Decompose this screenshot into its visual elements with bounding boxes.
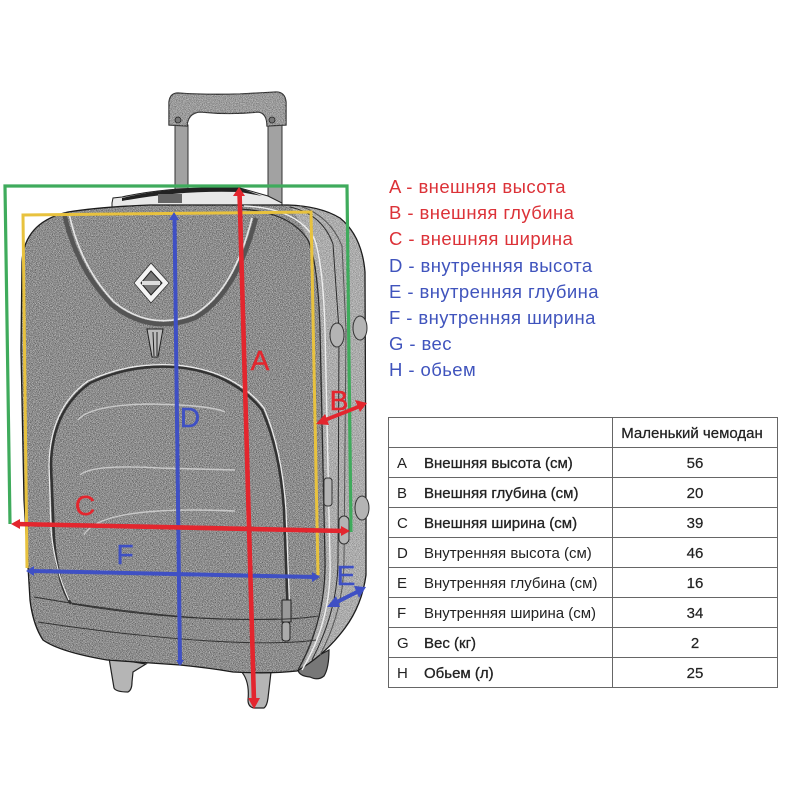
legend: B - внешняя глубина: [389, 202, 575, 223]
row values: 39: [687, 515, 703, 532]
dimension letters on the suitcase: A: [251, 345, 270, 376]
row letters: D: [397, 545, 408, 562]
row labels: Обьем (л): [424, 665, 494, 682]
row letters: A: [397, 455, 407, 472]
row letters: [397, 455, 409, 682]
row values: 25: [687, 665, 703, 682]
outline: inner dimensions (yellow): [23, 212, 318, 575]
table of dimensions: [388, 417, 778, 688]
suitcase body: [21, 205, 366, 673]
row letters: B: [397, 485, 407, 502]
row values: [687, 455, 703, 682]
row letters: F: [397, 605, 406, 622]
row values: 56: [687, 455, 703, 472]
arrow E: inner depth: [327, 586, 366, 607]
top pocket with zipper arc: [64, 213, 256, 324]
arrow C: outer width: [11, 519, 350, 536]
front pocket with zipper: [49, 365, 290, 619]
arrow A: outer height: [233, 187, 260, 709]
row labels: Внутренняя глубина (см): [424, 575, 597, 592]
dimension letters on the suitcase: E: [337, 560, 355, 591]
dimension letters on the suitcase: [75, 345, 355, 591]
row values: 2: [691, 635, 699, 652]
dimension letters on the suitcase: F: [116, 539, 134, 570]
legend: G - вес: [389, 333, 452, 354]
icon: rear wheels: [109, 650, 329, 708]
legend: D - внутренняя высота: [389, 255, 593, 276]
bottom panel seams: [34, 597, 318, 643]
dimension letters on the suitcase: B: [330, 385, 348, 416]
row letters: C: [397, 515, 408, 532]
row labels: Внешняя высота (см): [424, 455, 573, 472]
row values: 16: [687, 575, 703, 592]
legend: F - внутренняя ширина: [389, 307, 596, 328]
legend: [389, 176, 599, 380]
arrow D: inner height: [169, 212, 184, 666]
side panel seams and zippers: [240, 206, 346, 670]
legend: C - внешняя ширина: [389, 228, 574, 249]
icon: top pocket zipper pull: [147, 329, 163, 357]
row values: 20: [687, 485, 703, 502]
row labels: Внешняя глубина (см): [424, 485, 578, 502]
icon: side feet and side zipper pull: [324, 316, 369, 544]
row labels: Внешняя ширина (см): [424, 515, 577, 532]
arrow B: outer depth: [316, 400, 367, 425]
row letters: E: [397, 575, 407, 592]
legend: A - внешняя высота: [389, 176, 566, 197]
row letters: G: [397, 635, 409, 652]
table grid: [388, 417, 778, 688]
dimension letters on the suitcase: D: [180, 402, 200, 433]
dimension letters on the suitcase: C: [75, 490, 95, 521]
row labels: [424, 455, 597, 682]
icon: telescopic handle: [169, 92, 286, 207]
suitcase illustration: [21, 92, 369, 708]
row labels: Внутренняя высота (см): [424, 545, 592, 562]
table header: Маленький чемодан: [621, 425, 763, 442]
side panel shading: [290, 206, 366, 670]
row labels: Вес (кг): [424, 635, 476, 652]
row labels: Внутренняя ширина (см): [424, 605, 596, 622]
legend: H - обьем: [389, 359, 476, 380]
icon: brand diamond logo: [134, 263, 169, 303]
icon: front pocket zipper pull: [282, 600, 291, 641]
outline: outer dimensions (green): [5, 186, 351, 532]
row values: 46: [687, 545, 703, 562]
legend: E - внутренняя глубина: [389, 281, 599, 302]
arrow F: inner width: [26, 566, 320, 582]
row letters: H: [397, 665, 408, 682]
icon: carry handle on top: [112, 188, 282, 207]
row values: 34: [687, 605, 703, 622]
